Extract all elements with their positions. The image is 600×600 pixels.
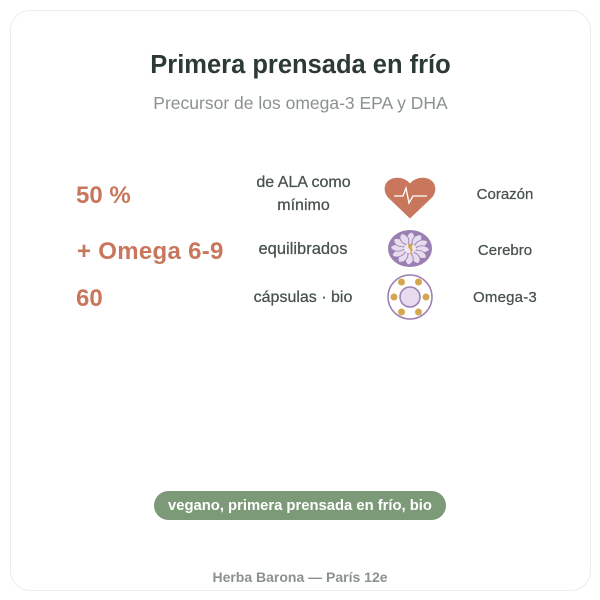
stat: + Omega 6-9: + Omega 6-9: [77, 238, 224, 265]
badge: vegano, primera prensada en frío, bio: [168, 498, 432, 514]
label: de ALA como mínimo: de ALA como: [256, 174, 351, 191]
icon: brain: [388, 230, 432, 267]
label: cápsulas · bio: cápsulas · bio: [254, 289, 352, 306]
label: equilibrados: equilibrados: [259, 240, 347, 258]
label: de ALA como mínimo: [256, 174, 351, 214]
label: Corazón: Corazón: [477, 186, 533, 203]
icon: heart: [384, 178, 436, 218]
icon: omega-3 capsule ring: [387, 274, 433, 320]
label: Cerebro: Cerebro: [478, 242, 532, 259]
stat: 50 %: 50 %: [76, 182, 131, 209]
label: Omega-3: Omega-3: [473, 289, 537, 306]
footer: Herba Barona — París 12e: [212, 569, 388, 585]
title: Primera prensada en frío: [150, 51, 451, 79]
label: de ALA como mínimo: mínimo: [277, 197, 330, 214]
stat: 60: 60: [76, 285, 103, 312]
subtitle: Precursor de los omega-3 EPA y DHA: [153, 93, 448, 113]
badge: [154, 491, 446, 520]
